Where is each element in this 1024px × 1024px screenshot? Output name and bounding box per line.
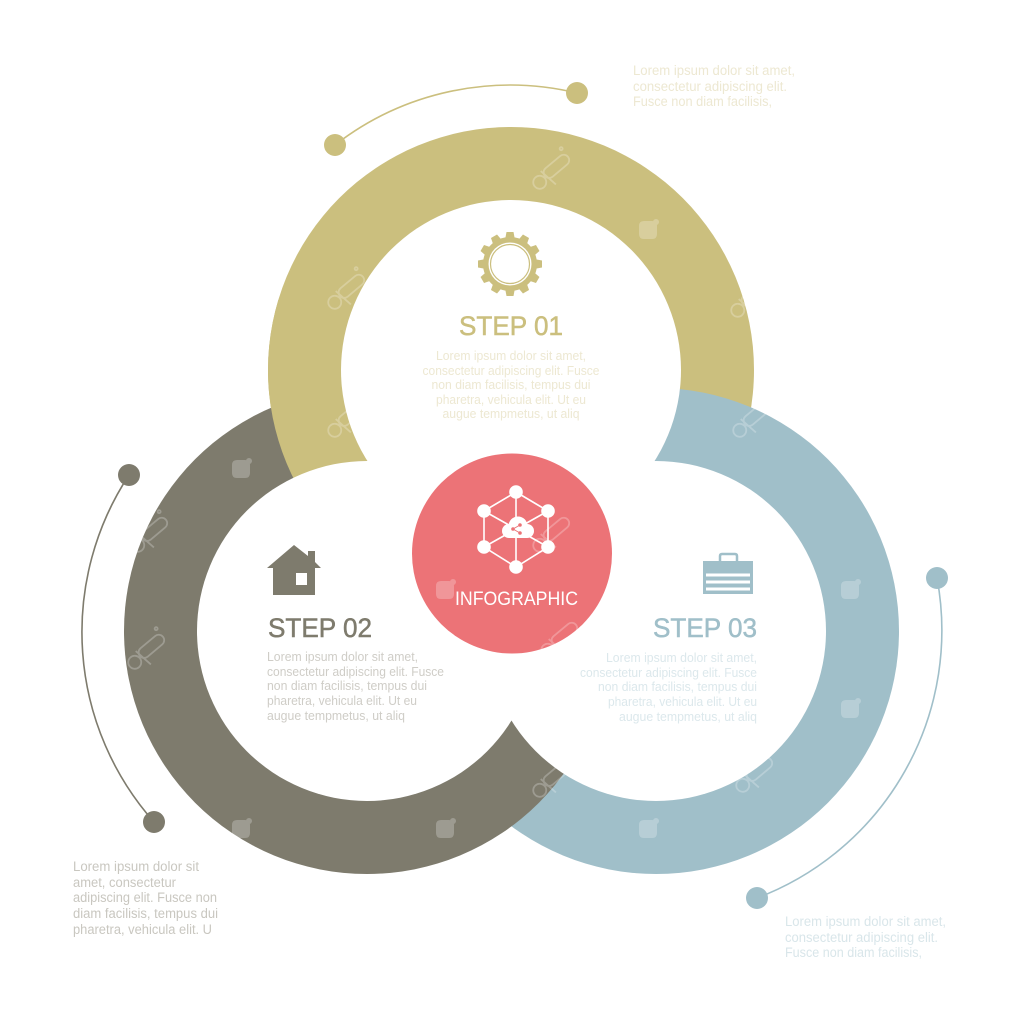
infographic canvas	[74, 65, 948, 959]
text block: step 01: pharetra, vehicula elit. Ut eu	[436, 393, 586, 407]
heading: step 02: STEP 02	[268, 613, 372, 643]
callout text: bottom right: consectetur adipiscing elit.	[785, 930, 938, 945]
text block: step 02: non diam facilisis, tempus dui	[267, 679, 427, 693]
callout text: bottom left	[73, 859, 218, 937]
callout text: bottom left: pharetra, vehicula elit. U	[73, 922, 212, 937]
text block: step 01: non diam facilisis, tempus dui	[432, 378, 590, 392]
callout text: top: consectetur adipiscing elit.	[633, 79, 787, 94]
callout text: top: Fusce non diam facilisis,	[633, 94, 772, 109]
callout connector: top olive	[324, 82, 588, 156]
text block: step 03: augue tempmetus, ut aliq	[619, 710, 757, 724]
ring: step 02 dark	[124, 388, 610, 874]
heading: step 01: STEP 01	[459, 311, 563, 341]
text block: step 03: consectetur adipiscing elit. Fusce	[580, 666, 757, 680]
icon: gear	[478, 232, 542, 296]
ring overlap: olive over dark	[268, 300, 368, 478]
badge circle	[412, 454, 612, 654]
callout text: bottom left: Lorem ipsum dolor sit	[73, 859, 199, 874]
three interlocking rings	[124, 127, 899, 874]
text block: step 03: non diam facilisis, tempus dui	[598, 680, 757, 694]
icon: network cube with cloud	[477, 485, 555, 574]
text block: step 02: pharetra, vehicula elit. Ut eu	[267, 694, 417, 708]
ring: step 01 olive	[268, 127, 754, 613]
callout connector: left dark	[82, 464, 165, 833]
callout text: bottom left: adipiscing elit. Fusce non	[73, 890, 217, 905]
callout text: top	[633, 63, 795, 109]
callout text: bottom left: amet, consectetur	[73, 875, 176, 890]
text block: step 01	[422, 349, 600, 421]
callout text: bottom right: Fusce non diam facilisis,	[785, 945, 922, 960]
text block: step 03: pharetra, vehicula elit. Ut eu	[608, 695, 757, 709]
icon: house	[267, 545, 321, 595]
text block: step 03	[580, 651, 757, 724]
callout connector: right blue	[746, 567, 948, 909]
badge watermark	[436, 515, 585, 664]
ring: step 03 blue	[413, 388, 899, 874]
text block: step 02: consectetur adipiscing elit. Fusce	[267, 665, 444, 679]
callout text: bottom right	[785, 914, 946, 960]
text block: step 02	[267, 650, 444, 723]
text block: step 01: augue tempmetus, ut aliq	[442, 407, 580, 421]
callout text: bottom right: Lorem ipsum dolor sit amet,	[785, 914, 946, 929]
callout text: bottom left: diam facilisis, tempus dui	[73, 906, 218, 921]
icon: briefcase	[703, 554, 753, 594]
inner white area	[197, 200, 826, 801]
text block: step 02: Lorem ipsum dolor sit amet,	[267, 650, 418, 664]
text block: step 01: consectetur adipiscing elit. Fusce	[422, 364, 600, 378]
text block: step 03: Lorem ipsum dolor sit amet,	[606, 651, 757, 665]
text block: step 01: Lorem ipsum dolor sit amet,	[436, 349, 586, 363]
callout text: top: Lorem ipsum dolor sit amet,	[633, 63, 795, 78]
badge label: INFOGRAPHIC	[455, 589, 578, 610]
watermarks on rings	[121, 147, 861, 838]
center badge	[412, 454, 612, 664]
text block: step 02: augue tempmetus, ut aliq	[267, 709, 405, 723]
heading: step 03: STEP 03	[653, 613, 757, 643]
